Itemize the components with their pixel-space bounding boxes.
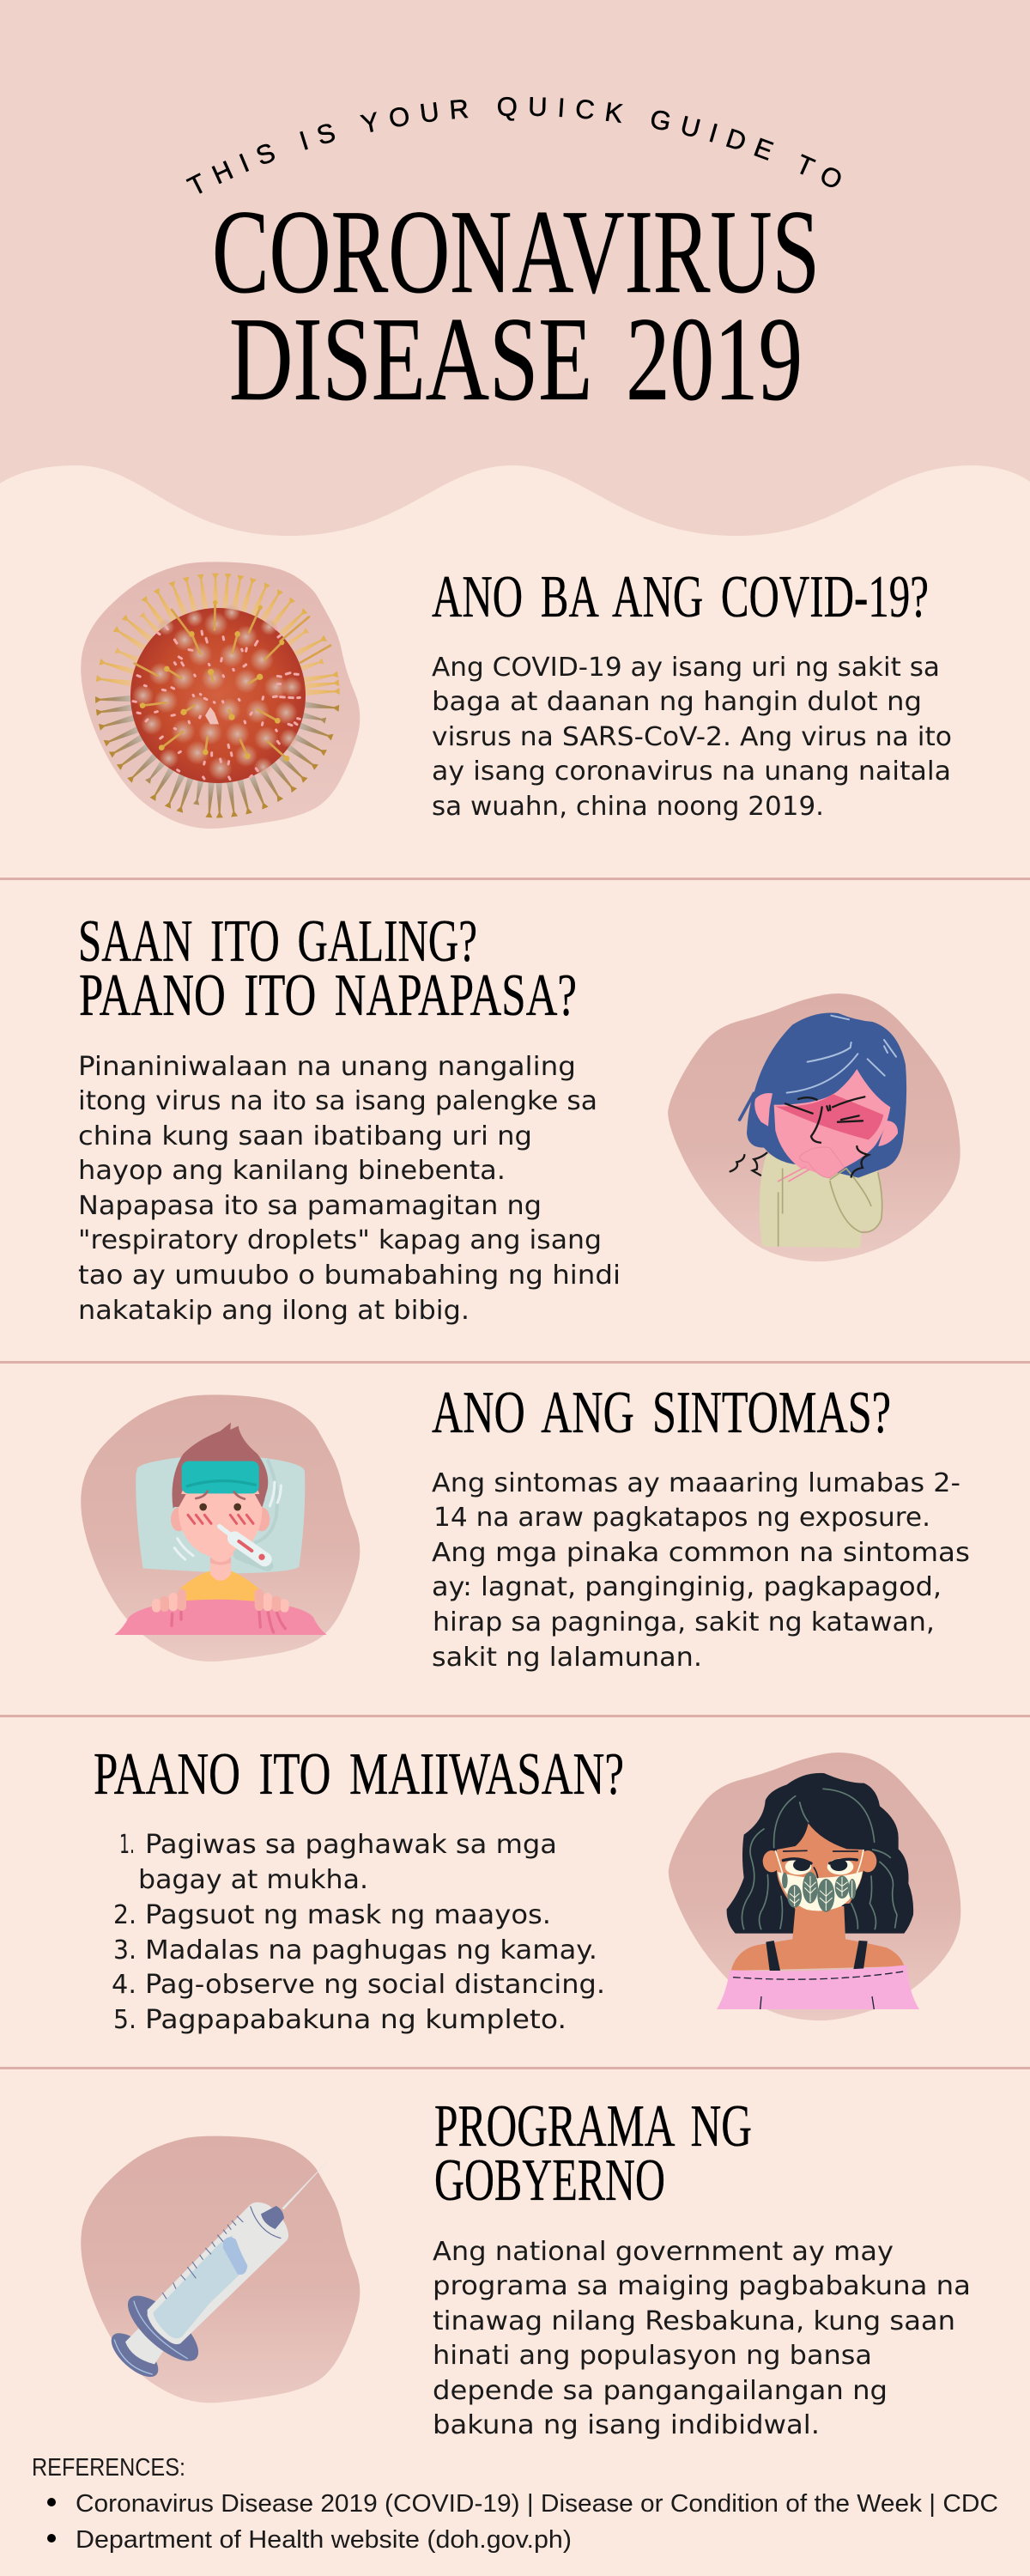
- body text: hayop ang kanilang binebenta.: [78, 1156, 506, 1186]
- body text: [433, 2237, 971, 2440]
- body text: Pinaniniwalaan na unang nangaling: [78, 1052, 576, 1082]
- numbered list: 5.: [113, 2005, 136, 2035]
- body text: nakatakip ang ilong at bibig.: [78, 1296, 470, 1326]
- numbered list: Pag-observe ng social distancing.: [145, 1970, 605, 2000]
- body text: china kung saan ibatibang uri ng: [78, 1121, 532, 1151]
- heading: [78, 908, 577, 1029]
- body text: [78, 1052, 621, 1326]
- body text: ay: lagnat, panginginig, pagkapagod,: [432, 1572, 942, 1602]
- numbered list: 2.: [113, 1900, 136, 1930]
- body text: programa sa maiging pagbabakuna na: [433, 2271, 971, 2301]
- icon: coughing person: [668, 993, 960, 1261]
- numbered list: 1.: [119, 1830, 135, 1860]
- arched subtitle: THIS IS YOUR QUICK GUIDE TO: [185, 96, 841, 194]
- title: [212, 185, 820, 426]
- body text: Napapasa ito sa pamamagitan ng: [78, 1191, 542, 1221]
- panel: what is COVID-19: [81, 562, 952, 829]
- body text: visrus na SARS-CoV-2. Ang virus na ito: [432, 722, 952, 752]
- header wave background: [0, 0, 1030, 536]
- body text: "respiratory droplets" kapag ang isang: [78, 1225, 602, 1255]
- body text: Ang national government ay may: [433, 2237, 894, 2267]
- title: DISEASE 2019: [229, 293, 803, 426]
- heading: SAAN ITO GALING?: [78, 908, 477, 975]
- body text: Ang COVID-19 ay isang uri ng sakit sa: [432, 653, 940, 683]
- references: [32, 2454, 998, 2554]
- numbered list: Madalas na paghugas ng kamay.: [145, 1935, 597, 1965]
- body text: 14 na araw pagkatapos ng exposure.: [433, 1503, 930, 1533]
- body text: hirap sa pagninga, sakit ng katawan,: [433, 1607, 935, 1637]
- icon: vaccine syringe: [81, 2136, 360, 2403]
- body text: [432, 653, 952, 822]
- icon: coronavirus particle: [81, 562, 360, 829]
- body text: ay isang coronavirus na unang naitala: [432, 756, 951, 787]
- body text: itong virus na ito sa isang palengke sa: [78, 1086, 597, 1116]
- heading: PROGRAMA NG: [434, 2093, 752, 2160]
- icon: woman wearing mask: [669, 1753, 960, 2020]
- body text: tinawag nilang Resbakuna, kung saan: [433, 2306, 955, 2336]
- panel: government program: [81, 2093, 971, 2440]
- numbered list: [112, 1830, 605, 2035]
- body text: [432, 1468, 970, 1673]
- body text: sakit ng lalamunan.: [432, 1643, 702, 1673]
- header panel: [0, 0, 1030, 536]
- body text: tao ay umuubo o bumabahing ng hindi: [78, 1261, 621, 1291]
- references: Coronavirus Disease 2019 (COVID-19) | Disease or Condition of the Week | CDC: [76, 2490, 998, 2518]
- body text: Ang sintomas ay maaaring lumabas 2-: [432, 1468, 960, 1498]
- panel: prevention: [94, 1741, 960, 2035]
- heading: PAANO ITO MAIIWASAN?: [94, 1741, 624, 1807]
- body text: bakuna ng isang indibidwal.: [433, 2410, 820, 2440]
- panel: symptoms: [81, 1380, 970, 1673]
- body text: depende sa pangangailangan ng: [433, 2376, 888, 2406]
- heading: GOBYERNO: [434, 2148, 665, 2214]
- body text: sa wuahn, china noong 2019.: [432, 792, 824, 822]
- numbered list: Pagpapabakuna ng kumpleto.: [145, 2005, 566, 2035]
- references: REFERENCES:: [32, 2454, 185, 2482]
- numbered list: bagay at mukha.: [138, 1865, 368, 1895]
- body text: hinati ang populasyon ng bansa: [433, 2341, 872, 2371]
- body text: baga at daanan ng hangin dulot ng: [432, 687, 922, 717]
- references: Department of Health website (doh.gov.ph): [76, 2526, 572, 2554]
- heading: [434, 2093, 752, 2214]
- body text: Ang mga pinaka common na sintomas: [432, 1538, 970, 1568]
- numbered list: 4.: [112, 1970, 136, 2000]
- numbered list: Pagsuot ng mask ng maayos.: [145, 1900, 551, 1930]
- panel: origin and spread: [78, 908, 960, 1326]
- heading: PAANO ITO NAPAPASA?: [79, 963, 577, 1029]
- numbered list: Pagiwas sa paghawak sa mga: [145, 1830, 557, 1860]
- icon: sick boy with thermometer: [81, 1394, 360, 1662]
- numbered list: 3.: [113, 1935, 136, 1965]
